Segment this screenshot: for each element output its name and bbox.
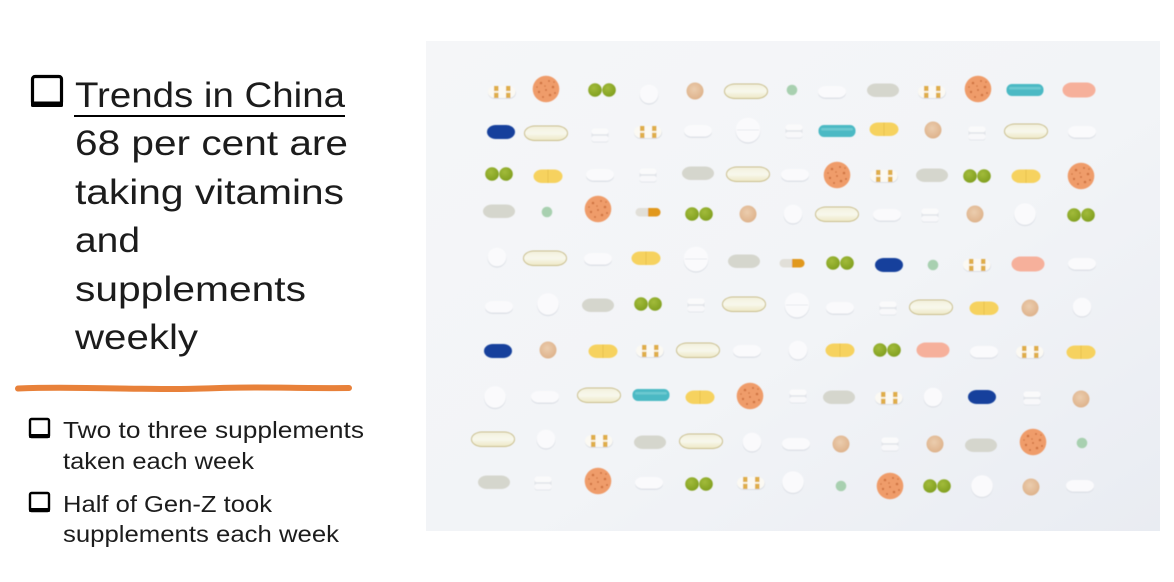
text block: half of Gen-Z: Half of Gen-Z took: [63, 491, 272, 517]
pill row 7: [484, 341, 1096, 361]
pill row 10: [478, 468, 1094, 499]
text block: 68 per cent statement: supplements: [75, 270, 306, 309]
text block: 68 per cent statement: 68 per cent are: [75, 124, 348, 163]
pill row 1: [488, 76, 1096, 105]
text block: half of Gen-Z: supplements each week: [63, 521, 339, 547]
text block: two to three supplements: taken each week: [63, 448, 254, 474]
icon: large checkbox bullet: [31, 76, 63, 107]
text block: 68 per cent statement: taking vitamins: [75, 173, 344, 212]
pill row 4: [483, 196, 1095, 226]
pill row 5: [488, 247, 1096, 273]
photo panel: rows of vitamin pills and supplements: [426, 41, 1160, 531]
divider: hand-drawn orange line: [18, 387, 349, 389]
pill row 3: [485, 162, 1094, 189]
pill row 9: [471, 429, 1087, 455]
text block: two to three supplements: Two to three supplements: [63, 417, 364, 443]
icon: small checkbox bullet two: [29, 493, 50, 512]
pill row 2: [487, 118, 1096, 144]
text block: 68 per cent statement: [74, 124, 348, 357]
text block: 68 per cent statement: weekly: [74, 318, 199, 357]
pill row 8: [484, 383, 1090, 409]
text block: 68 per cent statement: and: [75, 221, 140, 260]
text block: half of Gen-Z: [63, 491, 339, 547]
icon: small checkbox bullet one: [29, 419, 50, 438]
heading: Trends in China: Trends in China: [75, 76, 346, 115]
text block: two to three supplements: [63, 417, 364, 474]
pill row 6: [485, 293, 1092, 319]
